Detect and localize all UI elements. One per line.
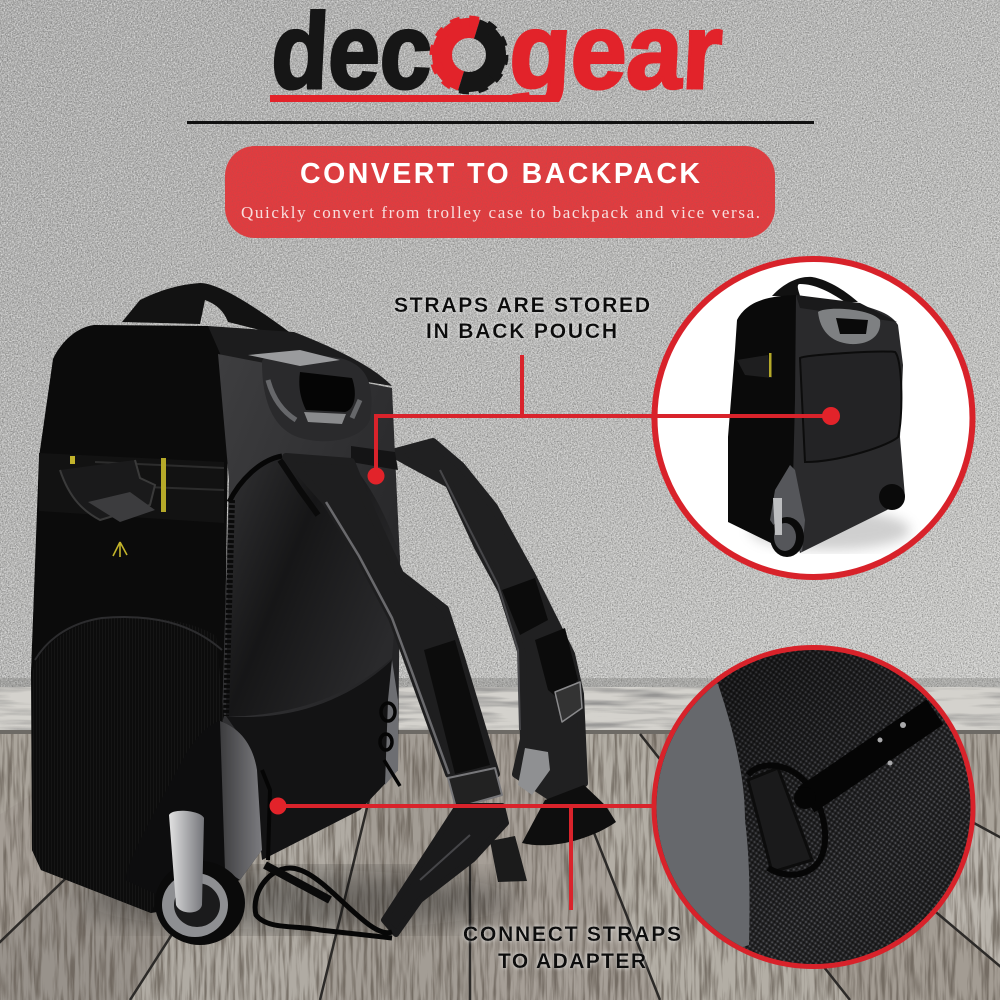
- grey trim panel: [656, 684, 750, 947]
- front shoulder strap: [255, 457, 506, 938]
- label: connect straps: [463, 923, 681, 973]
- logo underline bar: [270, 95, 551, 102]
- logo icon: split gear: [435, 21, 503, 89]
- wheel: [155, 811, 245, 945]
- inset leader stub: [640, 804, 655, 808]
- thin looped webbing: [255, 868, 392, 938]
- right edge silver trim: [385, 660, 398, 785]
- lower side pocket: [32, 617, 224, 913]
- side webbing band with yellow tags: [39, 453, 224, 557]
- inset bag face: [792, 295, 905, 553]
- rear strap tabs: [502, 578, 578, 700]
- callout dot: adapter point: [270, 798, 286, 814]
- subtitle: Quickly convert from trolley case to backpack and vice versa.: [241, 203, 760, 222]
- rear strap silver buckle: [518, 748, 550, 795]
- inset top panel: [796, 295, 897, 322]
- label: straps stored: [394, 294, 650, 343]
- bag handle: [122, 283, 300, 340]
- padded strap end: [384, 806, 506, 934]
- callout line: straps stored: [376, 355, 830, 476]
- carry handle grip: [248, 350, 371, 441]
- background: baseboard: [0, 687, 1000, 735]
- clip strap: [806, 712, 935, 800]
- handle face panel: [218, 354, 400, 810]
- lower pouch: [226, 660, 398, 860]
- top panel: [208, 326, 392, 386]
- fabric weave: [650, 645, 980, 975]
- D-ring: [748, 765, 825, 875]
- wheel housing: [125, 721, 262, 905]
- logo: Deco Gear: [270, 9, 723, 102]
- label: straps stored: IN BACK POUCH: [426, 320, 617, 343]
- callout dot: top of backpack: [368, 468, 384, 484]
- inset side buckle: [737, 355, 772, 378]
- heading panel: [225, 146, 775, 238]
- webbing loop: [748, 768, 812, 872]
- zipper pull: [280, 460, 318, 515]
- strap rivets: [878, 722, 906, 766]
- label: connect straps: TO ADAPTER: [498, 950, 646, 973]
- strap webbing: [424, 640, 490, 774]
- back-pouch opening edge: [351, 446, 398, 470]
- metal rings on trim: [380, 703, 400, 786]
- inset dot: [822, 407, 840, 425]
- title: CONVERT TO BACKPACK: [300, 158, 700, 190]
- rear shoulder strap: [392, 442, 616, 882]
- inset bag handle: [772, 277, 858, 302]
- inset wheel housing: [770, 465, 805, 552]
- zippered front pouch: [226, 456, 400, 716]
- inset circle: trolley view: [640, 259, 972, 577]
- inset bag side: [728, 295, 797, 553]
- inset circle: adapter close-up: [640, 640, 980, 980]
- rear strap slider: [555, 682, 582, 722]
- lower rear webbing: [522, 785, 616, 845]
- inset grip: [818, 309, 880, 344]
- left side panel: [31, 325, 240, 913]
- inset shadow: [750, 510, 910, 550]
- callout line: connect straps: [278, 806, 655, 910]
- inset leader line: [640, 414, 830, 418]
- tripod logo: [113, 542, 127, 557]
- inset wheels: [770, 517, 804, 557]
- label: connect straps: CONNECT STRAPS: [463, 923, 681, 946]
- adapter loop: [262, 770, 270, 860]
- background: concrete wall: [0, 0, 1000, 690]
- inset pouch: [800, 352, 901, 462]
- side buckle: [60, 460, 155, 520]
- divider line: [187, 121, 814, 124]
- main photo: backpack trolley: [31, 283, 616, 945]
- floor shadow: [80, 870, 520, 930]
- label: straps stored: STRAPS ARE STORED: [394, 294, 650, 317]
- background: wooden deck planks: [0, 734, 1000, 1000]
- strap slider: [448, 768, 502, 808]
